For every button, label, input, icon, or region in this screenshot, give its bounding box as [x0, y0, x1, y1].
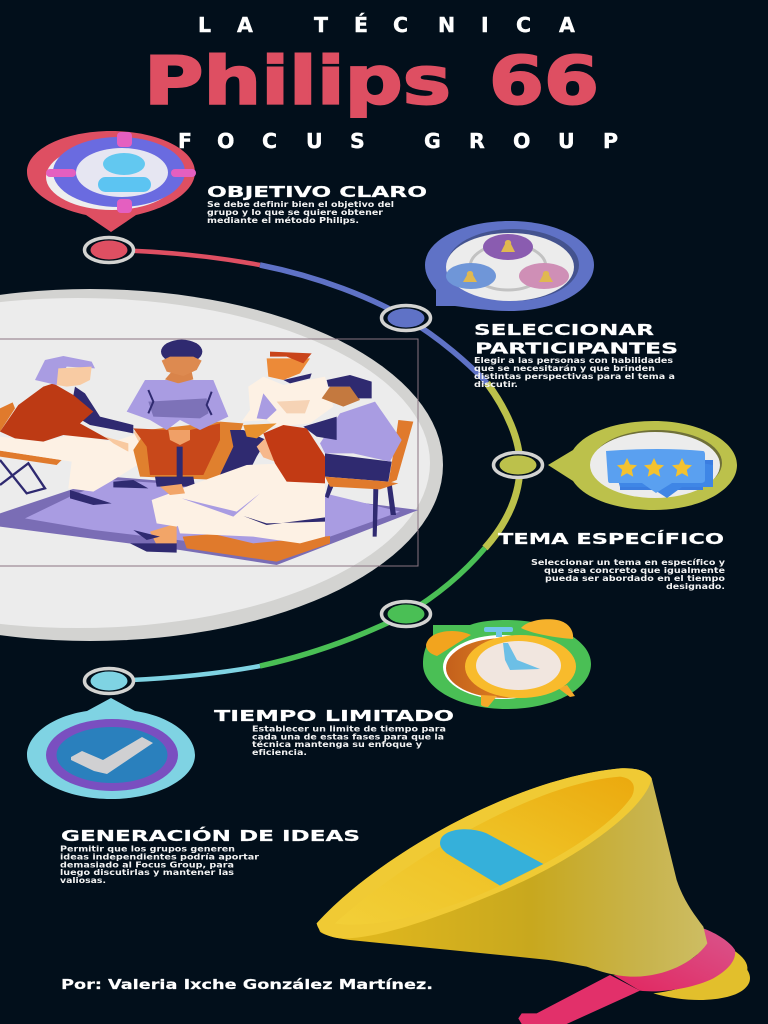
text block: tiempo limitado: eficiencia. — [252, 748, 307, 757]
text block: tema especifico: pueda ser abordado en el tiempo — [545, 574, 726, 583]
text block: tiempo limitado: cada una de estas fases para que la — [252, 732, 444, 742]
timeline node: olive — [494, 452, 542, 478]
text block: tiempo limitado: técnica mantenga su enfoque y — [252, 739, 423, 749]
text block: tema especifico: que sea concreto que igualmente — [544, 566, 726, 575]
text block: tema especifico: Seleccionar un tema en específico y — [531, 558, 726, 567]
title: Philips 66: 66 — [489, 42, 599, 120]
text block: objetivo claro: mediante el método Philips. — [207, 215, 359, 225]
title: Philips 66: Philips — [144, 42, 451, 120]
text block: generacion de ideas: demasiado al Focus Group, para — [60, 860, 234, 870]
text block: seleccionar participantes: discutir. — [474, 380, 518, 389]
text block: generacion de ideas: valiosas. — [60, 876, 106, 885]
text block: objetivo claro: Se debe definir bien el objetivo del — [207, 200, 394, 209]
text block: tiempo limitado — [214, 707, 454, 757]
text block: tema especifico — [498, 529, 726, 591]
text block: tiempo limitado: Establecer un limite de tiempo para — [252, 724, 446, 734]
text block: seleccionar participantes: que se necesitarán y que brinden — [474, 364, 655, 373]
timeline arc — [109, 250, 520, 681]
timeline node: green — [382, 602, 430, 626]
title: la tecnica: LA TÉCNICA — [198, 12, 575, 37]
text block: generacion de ideas: GENERACIÓN DE IDEAS — [61, 826, 360, 845]
text block: tiempo limitado: TIEMPO LIMITADO — [214, 707, 454, 725]
timeline node: cyan — [84, 668, 134, 694]
text block: seleccionar participantes — [474, 321, 678, 389]
text block: seleccionar participantes: SELECCIONAR — [474, 321, 654, 339]
text block: generacion de ideas: ideas independientes podría aportar — [60, 852, 259, 862]
icon: rating bubble — [548, 421, 737, 510]
subtitle: focus group: FOCUS GROUP — [178, 129, 618, 153]
icon: target user pin — [27, 131, 196, 232]
text block: seleccionar participantes: PARTICIPANTES — [475, 340, 678, 358]
icon: alarm clock — [423, 619, 591, 709]
text block: seleccionar participantes: Elegir a las personas con habilidades — [474, 356, 673, 365]
text block: generacion de ideas: Permitir que los grupos generen — [60, 844, 235, 854]
text block: objetivo claro: OBJETIVO CLARO — [207, 183, 427, 201]
title: Philips 66 — [144, 42, 599, 120]
author credit: Por: Valeria Ixche González Martínez. — [61, 978, 433, 993]
megaphone illustration — [317, 768, 750, 1024]
text block: seleccionar participantes: distintas perspectivas para el tema a — [474, 372, 675, 381]
timeline node: red — [84, 238, 134, 262]
icon: check mark drop — [27, 698, 195, 799]
text block: generacion de ideas — [60, 826, 360, 885]
text block: objetivo claro: grupo y lo que se quiere obtener — [207, 208, 383, 217]
illustration panel: focus group — [0, 289, 443, 641]
text block: objetivo claro — [207, 183, 427, 225]
icon: participants bubble — [425, 221, 594, 311]
timeline node: blue — [382, 306, 430, 330]
text block: generacion de ideas: luego discutirlas y mantener las — [60, 868, 234, 877]
text block: tema especifico: designado. — [666, 582, 725, 591]
text block: tema especifico: TEMA ESPECÍFICO — [498, 529, 724, 548]
